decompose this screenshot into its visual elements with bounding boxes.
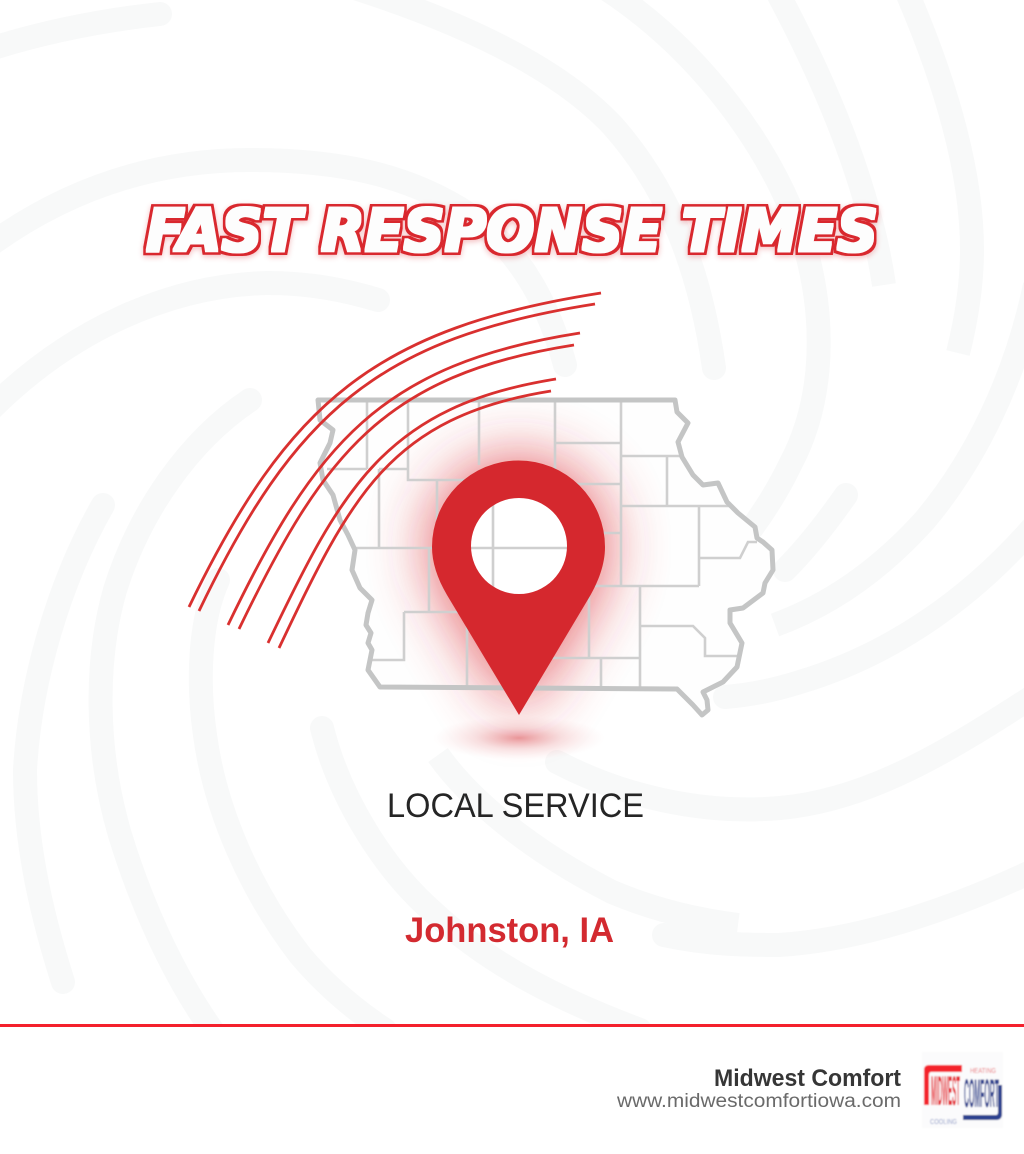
- state outline: [318, 400, 773, 715]
- label: city: Johnston, IA: [405, 911, 614, 950]
- pin hole backing: [470, 497, 568, 595]
- red glow behind pin: [432, 460, 605, 715]
- footer rule: [0, 1024, 1024, 1027]
- state base fill: [318, 400, 773, 715]
- logo: COOLING: [930, 1119, 957, 1126]
- pin ground shadow: [433, 716, 605, 760]
- label: local service: LOCAL SERVICE: [387, 787, 644, 825]
- map of Iowa with glowing pin: [318, 400, 773, 715]
- footer website: www.midwestcomfortiowa.com: [616, 1091, 901, 1112]
- logo: HEATING: [970, 1068, 996, 1075]
- footer band: [0, 1026, 1024, 1154]
- radiating signal arcs: [189, 293, 601, 648]
- title: FAST RESPONSE TIMES: [146, 196, 878, 265]
- location pin icon: [432, 460, 605, 715]
- county lines: [327, 400, 757, 689]
- logo: [922, 1052, 1003, 1128]
- footer company name: Midwest Comfort: [714, 1065, 901, 1092]
